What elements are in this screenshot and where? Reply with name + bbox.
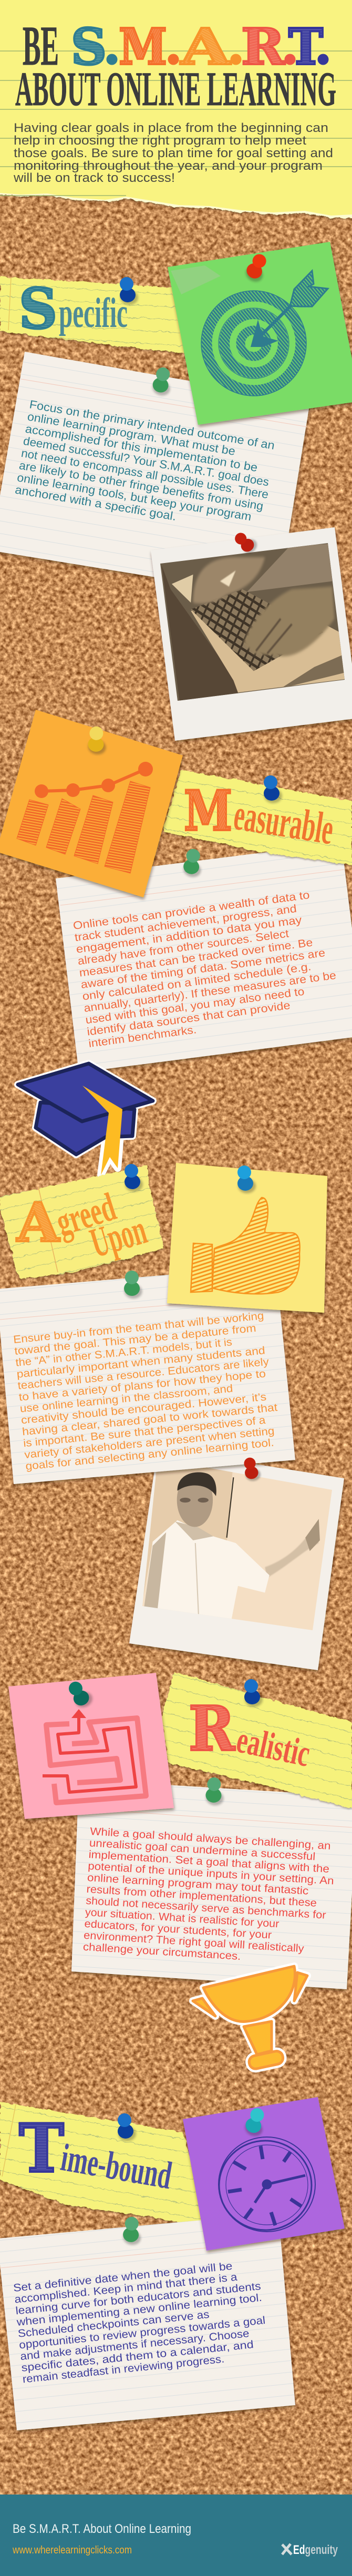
time-bound heading [19,2110,175,2197]
realistic body text: should not necessarily serve as benchmarks for [86,1895,326,1921]
measurable body text: aware of the timing of data. Some metrics are [80,947,326,991]
pin: blue [244,1679,263,1707]
time-bound heading: T [19,2110,64,2187]
measurable body text: used with this goal, you may also need to [85,986,305,1026]
measurable body text: measures that can be tracked over time. Be [78,936,314,979]
polaroid: teacher at whiteboard [129,1448,344,1670]
icon: maze with arrow [43,1709,146,1803]
realistic body text: your situation. What is realistic for your [85,1906,279,1930]
agreed upon heading: Upon [85,1207,152,1266]
specific body text: are likely to be other fringe benefits from using [18,458,264,513]
pin: red [242,252,273,285]
icon: graduation cap [18,1064,153,1175]
agreed upon body text: the “A” in other S.M.A.R.T. models, but it is [15,1336,233,1369]
title line 1: BE [23,15,59,77]
specific banner [0,276,200,353]
panel: Specific [0,242,352,597]
measurable body text [73,887,341,1050]
Edgenuity logo [282,2543,338,2557]
realistic body text: educators, for your students, for your [84,1918,272,1941]
time-bound body text: and make adjustments if necessary. Choose [19,2327,250,2363]
pin: green [123,1270,144,1300]
measurable body text: engagement, in addition to data you may [76,914,303,956]
agreed upon body text: variety of stakeholders are present when setting [24,1425,275,1461]
header paper [0,0,352,218]
specific body text: online learning tools, but keep your program [16,471,252,523]
footer title: Be S.M.A.R.T. About Online Learning [13,2522,191,2536]
agreed upon body text [13,1309,282,1473]
panel: Realistic [8,1672,352,2070]
time-bound body text: accomplished. Keep in mind that there is a [14,2271,238,2306]
time-bound banner [0,2102,210,2229]
agreed upon body text: goals for and selecting any online learning tool. [25,1436,274,1473]
pin: green [204,1776,226,1806]
agreed upon body text: toward the goal. This may be a depature from [14,1322,256,1357]
title line 1: T [288,18,323,76]
intro paragraph: monitoring throughout the year, and your program [14,159,323,173]
specific body text: online learning program. What must be [26,410,236,458]
specific body text: deemed successful? Your S.M.A.R.T. goal does [22,434,270,488]
pin: light blue [237,1166,256,1193]
time-bound body text: specific dates, add them to a calendar, and [21,2338,254,2374]
time-bound body text: when implementing a new online learning tool. [16,2292,263,2328]
pin: green [121,2216,144,2246]
intro paragraph: help in choosing the right program to help meet [14,134,306,148]
laptop photo [160,543,345,701]
time-bound body text: Set a definitive date when the goal will be [13,2260,233,2294]
realistic body text [82,1825,336,1968]
pin: blue [264,775,282,803]
time-bound index card [0,2213,295,2430]
realistic body text: environment? The right goal will realistically [84,1929,305,1955]
realistic body text: online learning program may tout fantastic [87,1872,309,1897]
agreed upon heading [16,1184,152,1266]
header: torn yellow legal pad [0,0,352,218]
title line 1: A [180,18,231,76]
specific body text [14,397,278,538]
panel: Measurable [0,710,352,1072]
measurable body text: interim benchmarks. [88,1024,197,1050]
pin: yellow [87,725,109,755]
specific body text: anchored with a specific goal. [14,483,178,523]
realistic index card [71,1780,352,1989]
pink sticky note [8,1673,174,1819]
realistic body text: results from other implementations, but these [86,1883,317,1909]
title line 1: S [71,18,107,76]
icon: clock [219,2137,315,2232]
agreed upon body text: particularly important when many students and [16,1344,266,1381]
measurable index card [56,843,352,1072]
agreed upon body text: to have a variety of plans for how they hope to [18,1367,266,1403]
realistic heading [189,1693,314,1775]
measurable body text: track student achievement, progress, and [74,903,297,944]
icon: thumbs up [191,1198,300,1294]
measurable body text: annually, quarterly). If these measures are to be [83,969,337,1015]
time-bound body text [12,2257,270,2386]
realistic body text: implementation. Set a goal that aligns with the [88,1848,330,1875]
pin: red on polaroid [244,1457,261,1482]
time-bound body text: remain steadfast in reviewing progress. [22,2353,225,2385]
specific index card [0,352,310,597]
title line 1: M [119,18,167,76]
measurable body text: identify data sources that can provide [86,999,291,1038]
pin: green [181,847,206,879]
measurable heading: M [184,778,232,843]
specific heading: S [19,276,57,341]
intro paragraph [13,121,333,185]
purple sticky note [183,2097,345,2251]
measurable body text: Online tools can provide a wealth of data to [73,889,310,932]
time-bound heading: ime-bound [58,2136,175,2197]
realistic body text: potential of the unique inputs in your setting. An [88,1860,334,1887]
polaroid: hands on laptop [151,527,352,741]
specific body text: not need to encompass all possible uses. There [20,446,270,501]
agreed upon body text: having a clear, shared goal to work towards that [22,1401,278,1438]
intro paragraph: Having clear goals in place from the beginning can [14,121,328,135]
title line 1: R [241,18,285,76]
icon: trophy [193,1966,307,2070]
agreed upon index card [0,1266,295,1484]
orange sticky note [0,710,183,897]
agreed upon banner [0,1166,164,1279]
pin: blue [118,2113,136,2141]
realistic heading: R [189,1693,235,1765]
pin: green [150,365,176,398]
measurable heading [184,778,337,854]
pin: dark teal [67,1678,95,1711]
agreed upon body text: use online learning in the classroom, and [19,1382,233,1415]
agreed upon heading: greed [51,1184,121,1244]
icon: rising bar chart [17,762,153,873]
realistic heading: ealistic [233,1718,314,1775]
time-bound body text: opportunities to review progress towards a goal [18,2314,266,2351]
title line 1 [23,15,329,77]
footer url: www.wherelearningclicks.com [12,2544,132,2556]
agreed upon heading: A [16,1191,60,1254]
intro paragraph: those goals. Be sure to plan time for goal setting and [14,146,333,160]
yellow sticky note [167,1163,327,1313]
measurable body text: only calculated on a limited schedule (e.g. [81,960,312,1003]
intro paragraph: will be on track to success! [13,171,175,185]
agreed upon body text: Ensure buy-in from the team that will be working [13,1310,264,1346]
agreed upon body text: is important. Be sure that the perspectives of a [23,1414,266,1449]
footer bar [0,2495,352,2576]
agreed upon body text: teachers will use a resource. Educators are likely [17,1356,270,1392]
icon: target with arrow [201,271,328,396]
specific body text: Focus on the primary intended outcome of an [28,397,276,452]
pin: blue [125,1164,143,1192]
measurable body text: already have from other sources. Select [77,927,289,967]
time-bound body text: learning curve for both educators and students [15,2280,262,2317]
panel: Agreed Upon [0,1064,327,1484]
panel: Time-bound [0,2097,345,2430]
agreed upon body text: creativity should be encouraged. However, it’s [20,1391,267,1426]
Edgenuity logo: Edgenuity [293,2543,338,2557]
specific heading: pecific [59,290,128,336]
measurable banner [163,770,352,865]
realistic body text: challenge your circumstances. [82,1941,241,1962]
specific heading [19,276,128,341]
teacher photo [142,1468,332,1630]
realistic banner [162,1672,352,1808]
realistic body text: unrealistic goal can undermine a successful [89,1837,316,1863]
time-bound body text: Scheduled checkpoints can serve as [17,2308,210,2340]
specific body text: accomplished for this implementation to be [24,422,258,474]
pin: blue [120,277,138,305]
green sticky note [168,242,352,425]
realistic body text: While a goal should always be challenging, an [90,1825,331,1852]
pin: cyan [242,2106,271,2139]
pin: red on polaroid [233,528,260,556]
